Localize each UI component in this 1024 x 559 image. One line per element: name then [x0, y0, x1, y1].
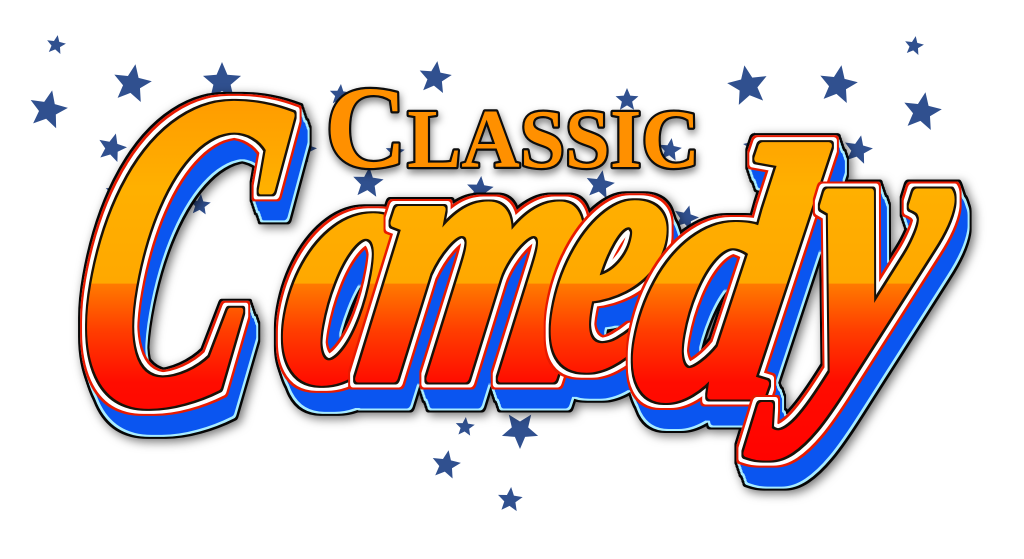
letter m: m [339, 53, 626, 457]
star field [26, 34, 944, 512]
letter e: e [528, 63, 699, 439]
title: Classic: CLASSIC [325, 62, 700, 193]
letter y: y [743, 26, 984, 457]
letter C: C [47, 4, 315, 497]
letter d: d [612, 77, 841, 473]
letter o: o [260, 76, 452, 452]
